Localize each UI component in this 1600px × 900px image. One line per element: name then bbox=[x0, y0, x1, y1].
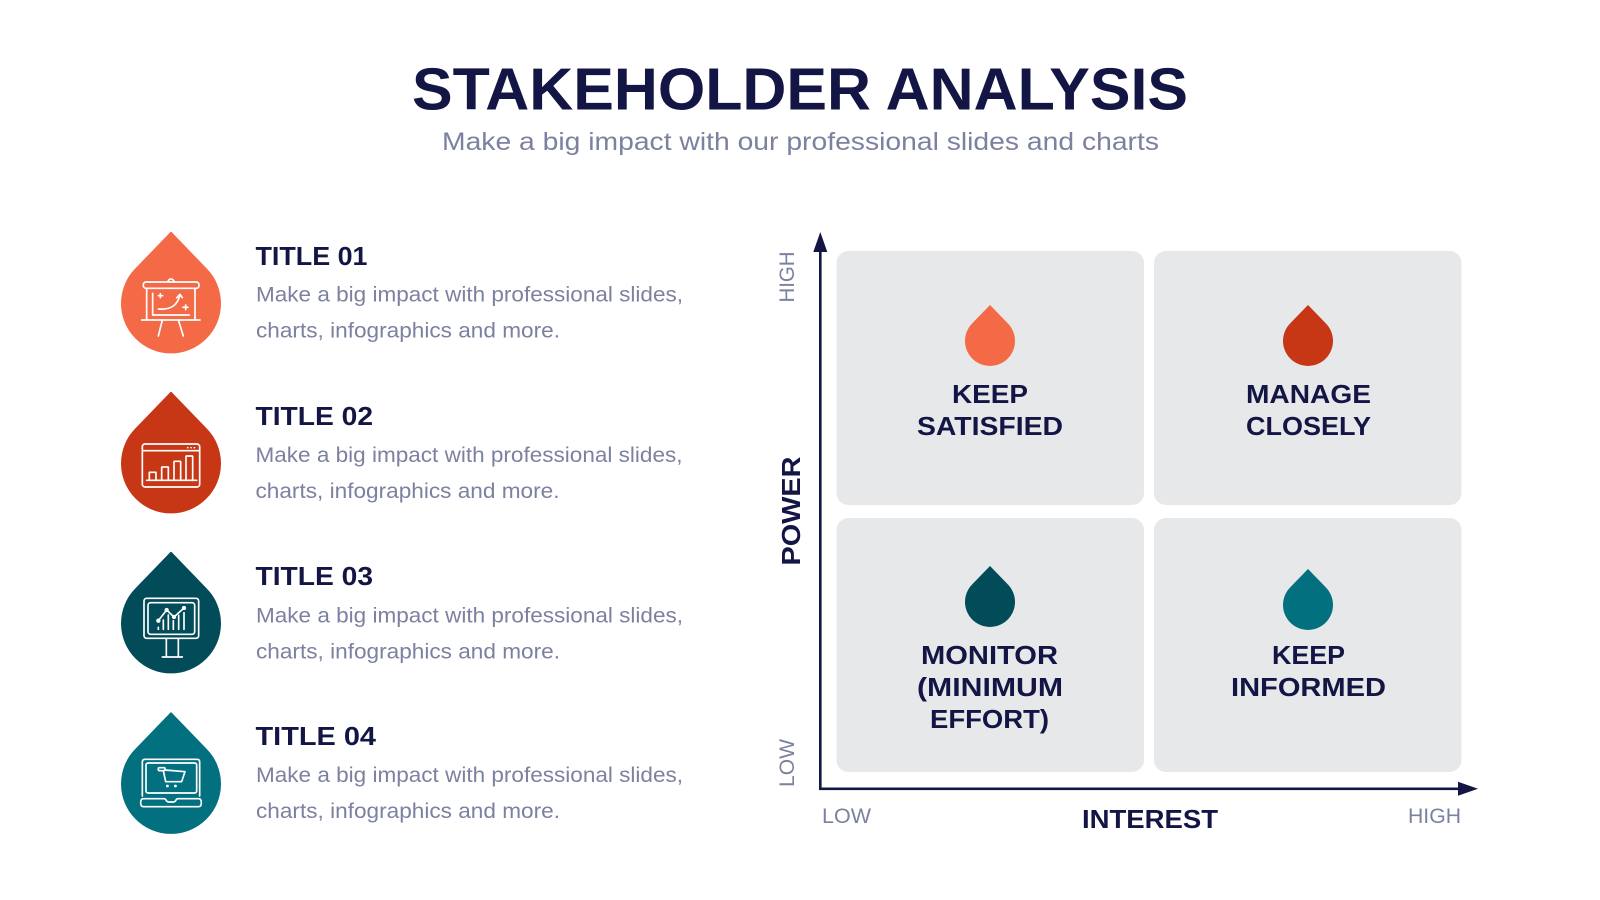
quadrant label: MONITOR bbox=[921, 640, 1058, 670]
item text bbox=[256, 604, 683, 664]
title: STAKEHOLDER ANALYSIS bbox=[412, 56, 1188, 122]
item text: charts, infographics and more. bbox=[256, 800, 560, 823]
item heading: TITLE 01 bbox=[256, 241, 368, 271]
icon: monitor line chart bbox=[144, 598, 199, 657]
quadrant label bbox=[1231, 640, 1386, 702]
axis label: low interest: LOW bbox=[822, 805, 871, 828]
item text bbox=[256, 284, 683, 342]
item text bbox=[256, 444, 682, 503]
item heading: TITLE 04 bbox=[256, 721, 377, 751]
subtitle: Make a big impact with our professional slides and charts bbox=[442, 128, 1159, 156]
icon: laptop shopping cart bbox=[141, 759, 201, 807]
arrow: interest axis bbox=[819, 782, 1478, 796]
quadrant label: MANAGE bbox=[1246, 379, 1371, 409]
quadrant label bbox=[917, 379, 1063, 441]
item text: Make a big impact with professional slides, bbox=[256, 604, 683, 628]
icon: teal drop bbox=[121, 712, 221, 834]
icon: teal drop small bbox=[1283, 569, 1333, 630]
quadrant label: INFORMED bbox=[1231, 672, 1386, 702]
quadrant label: CLOSELY bbox=[1246, 411, 1371, 441]
item text: Make a big impact with professional slides, bbox=[256, 284, 683, 306]
panel: keep satisfied bbox=[836, 251, 1144, 505]
quadrant label bbox=[1246, 379, 1371, 441]
panel: list item 01 bbox=[121, 232, 683, 353]
item text bbox=[256, 764, 683, 823]
panel: list item 04 bbox=[121, 712, 683, 834]
axis label: high interest: HIGH bbox=[1408, 805, 1461, 828]
icon: orange drop small bbox=[965, 305, 1015, 366]
panel: list item 02 bbox=[121, 392, 682, 513]
icon: red drop bbox=[121, 392, 221, 513]
quadrant label: EFFORT) bbox=[930, 704, 1049, 734]
icon: dark teal drop bbox=[121, 552, 221, 673]
panel: monitor minimum effort bbox=[836, 518, 1144, 772]
axis label: power: POWER bbox=[776, 456, 806, 566]
quadrant label: SATISFIED bbox=[917, 411, 1063, 441]
quadrant label: KEEP bbox=[1272, 640, 1345, 670]
panel: manage closely bbox=[1154, 251, 1462, 505]
icon: red drop small bbox=[1283, 305, 1333, 366]
item text: Make a big impact with professional slides, bbox=[256, 764, 683, 787]
item text: charts, infographics and more. bbox=[256, 480, 560, 503]
axis label: low power: LOW bbox=[776, 739, 799, 787]
item text: Make a big impact with professional slides, bbox=[256, 444, 682, 467]
quadrant label bbox=[917, 640, 1063, 734]
icon: browser bar chart bbox=[142, 444, 200, 487]
axis label: high power: HIGH bbox=[776, 252, 799, 302]
panel: list item 03 bbox=[121, 552, 683, 673]
item heading: TITLE 03 bbox=[256, 561, 373, 591]
icon: dark teal drop small bbox=[965, 566, 1015, 627]
icon: presentation board bbox=[142, 279, 200, 336]
item text: charts, infographics and more. bbox=[256, 320, 560, 342]
icon: orange drop bbox=[121, 232, 221, 353]
arrow: power axis bbox=[813, 232, 827, 790]
item text: charts, infographics and more. bbox=[256, 640, 560, 664]
panel: keep informed bbox=[1154, 518, 1462, 772]
quadrant label: (MINIMUM bbox=[917, 672, 1063, 702]
axis label: interest: INTEREST bbox=[1082, 804, 1218, 834]
quadrant label: KEEP bbox=[952, 379, 1028, 409]
item heading: TITLE 02 bbox=[256, 401, 373, 431]
